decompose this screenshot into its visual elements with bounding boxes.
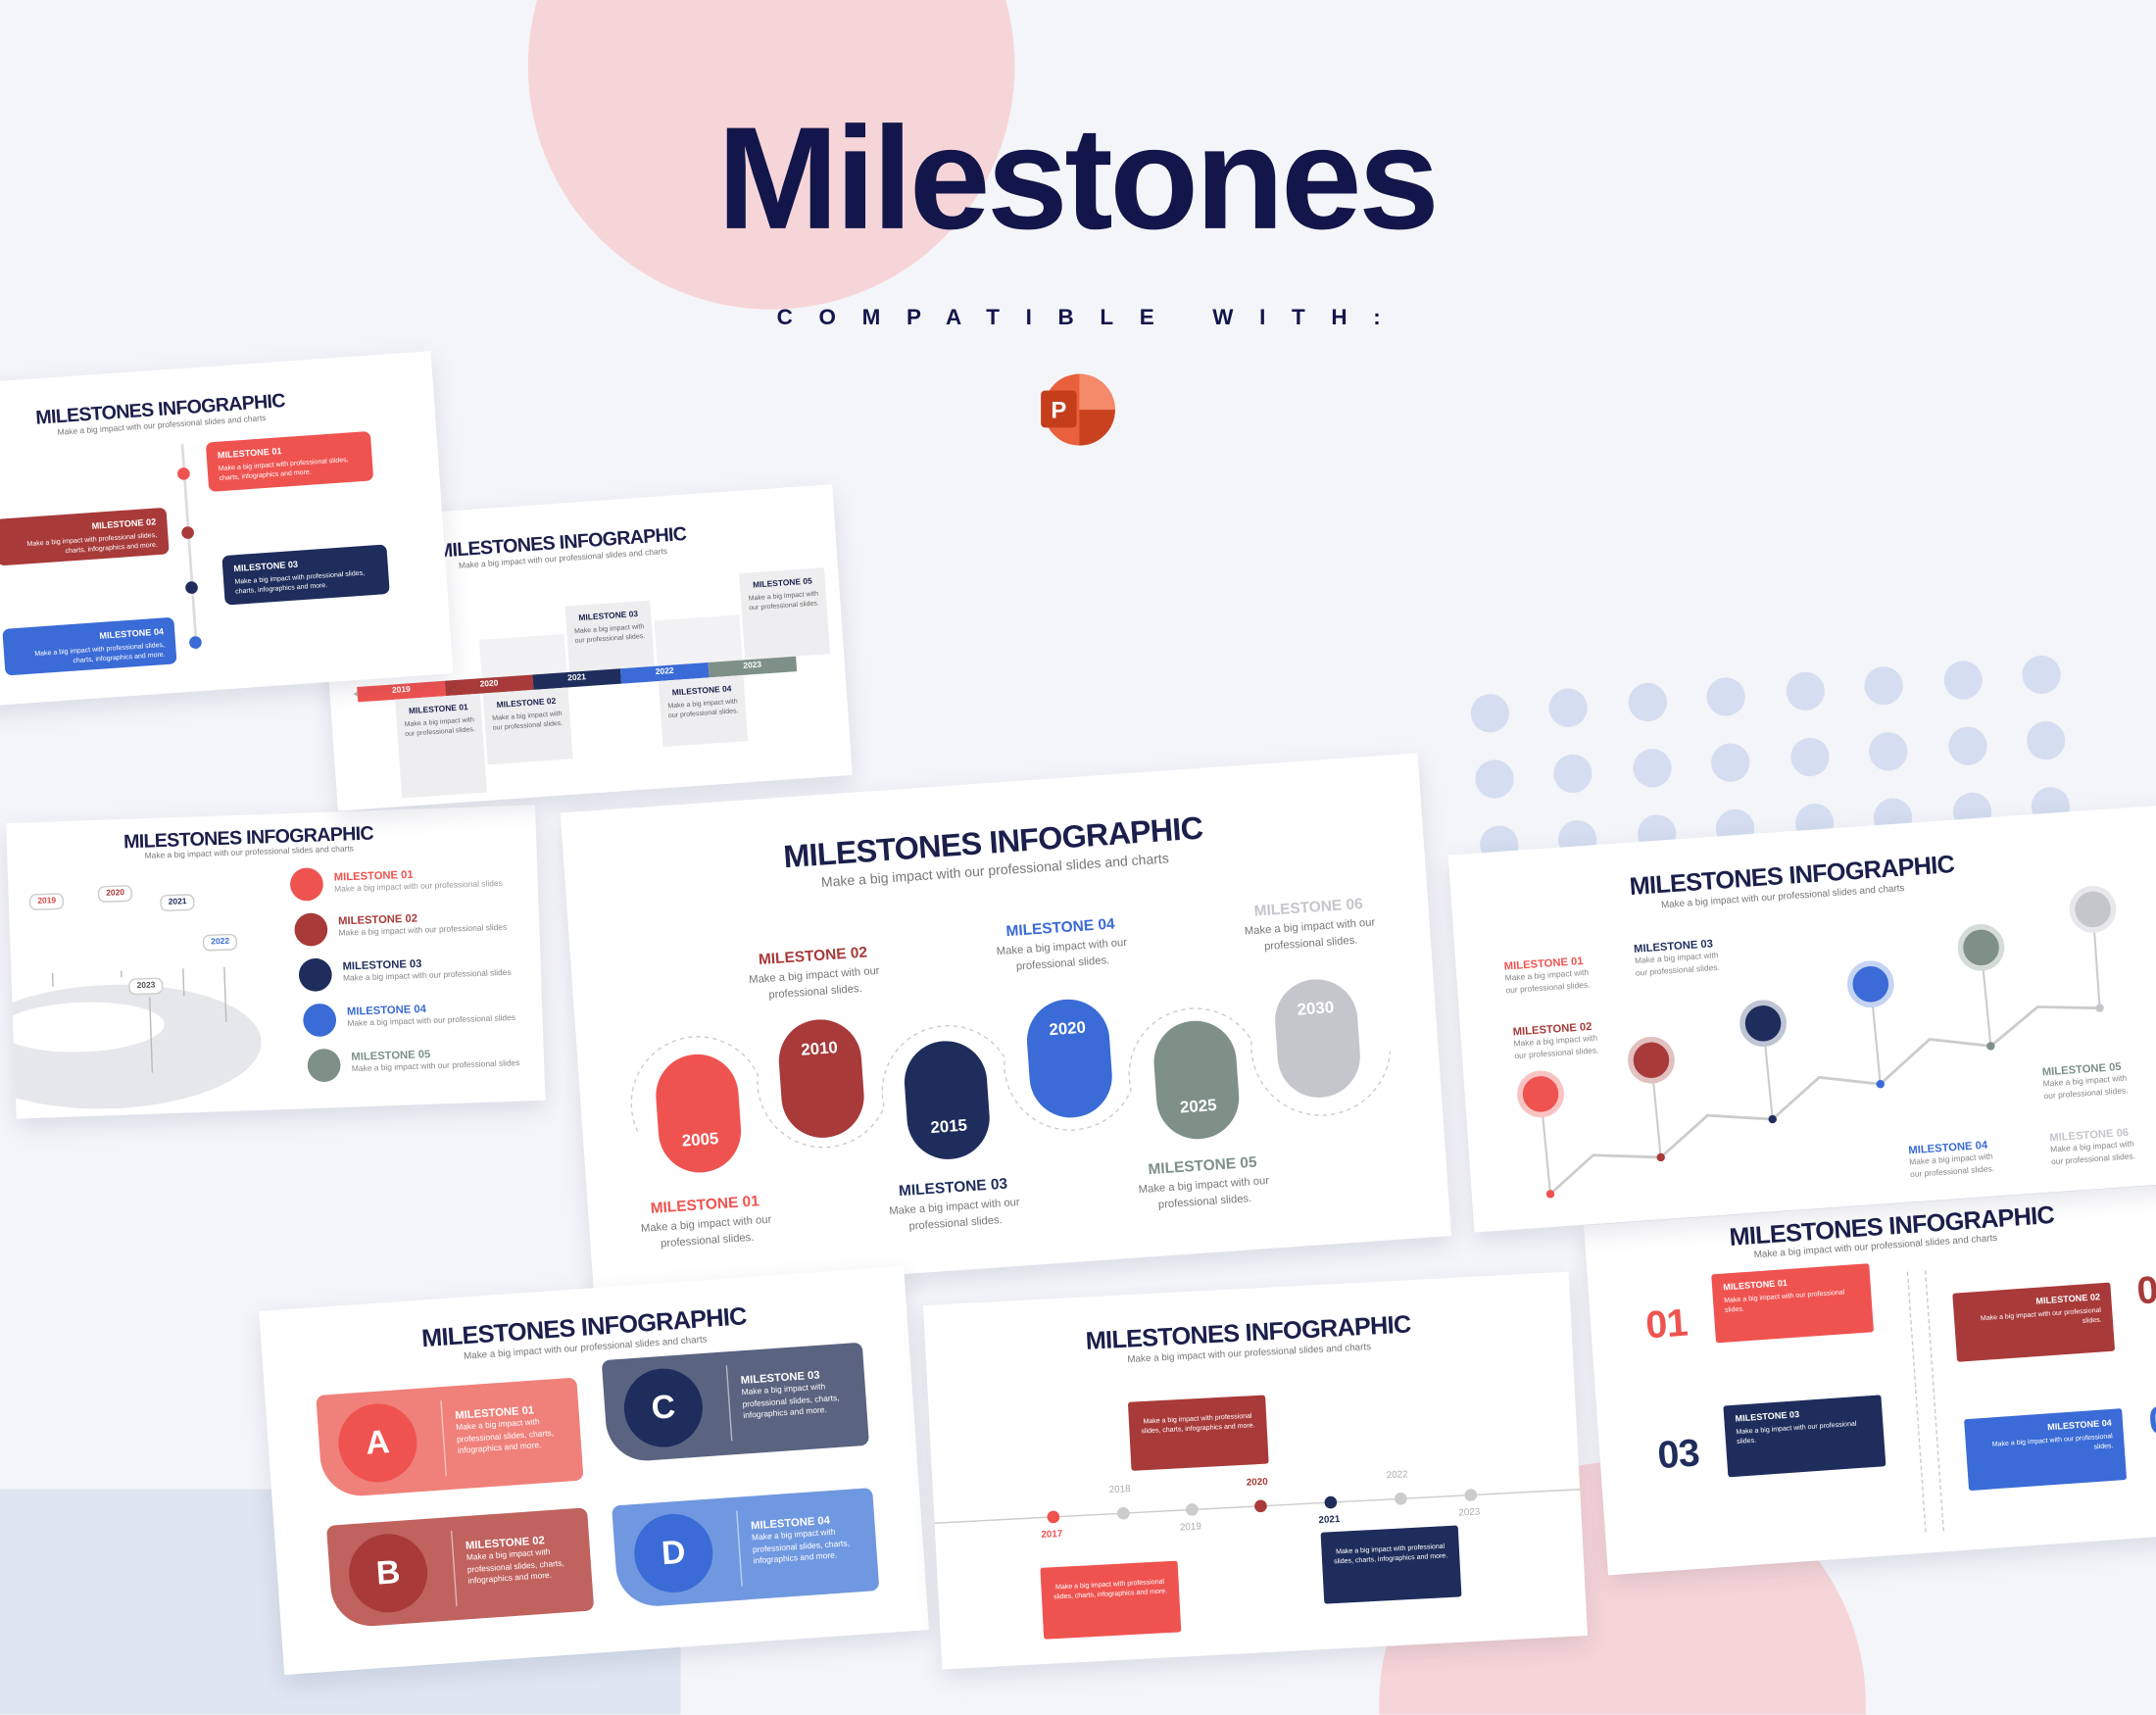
capsules: [654, 1052, 744, 1175]
slide heading: MILESTONES INFOGRAPHIC: [1629, 851, 1955, 901]
slide heading: MILESTONES INFOGRAPHIC: [436, 522, 687, 562]
slide heading: MILESTONES INFOGRAPHIC: [782, 809, 1203, 874]
milestone labels: Make a big impact with our professional slides.: [641, 1213, 772, 1250]
milestone texts: [1503, 955, 1591, 996]
panel: slide 6 numbered callouts: Make a big impact with our professional slides.: [1992, 1433, 2114, 1451]
box C: Make a big impact with professional slides, charts, infographics and more.: [741, 1384, 840, 1421]
milestone boxes: Make a big impact with professional slides, charts, infographics and more.: [219, 456, 349, 483]
milestone boxes: [206, 431, 373, 492]
panel: slide 5 line chart: Make a big impact with: [1635, 953, 1719, 966]
background: pink circle bottom: [1379, 1461, 1866, 1715]
panel: slide 6 numbered callouts: Make a big impact with our professional slides.: [1981, 1306, 2102, 1326]
panel: slide 8 dot timeline: Make a big impact with professional slides, charts, infographics and more.: [1334, 1543, 1447, 1566]
milestone list: MILESTONE 03: [342, 957, 422, 972]
panel: slide 3 list timeline: 2022: [211, 938, 229, 947]
panel: slide 1 vertical timeline: Make a big impact with our professional slides and charts: [57, 415, 267, 438]
panel: slide 6 numbered callouts: MILESTONE 02: [2035, 1293, 2100, 1307]
timeline bar: MILESTONE 01: [409, 704, 468, 716]
panel: slide 5 line chart: our professional slides.: [1910, 1165, 1994, 1179]
panel: slide 3 list timeline: [6, 805, 546, 1119]
timeline bar: MILESTONE 02: [496, 698, 557, 710]
line chart with icons: [1517, 886, 2117, 1199]
panel: slide 5 line chart: Make a big impact with: [2050, 1141, 2134, 1155]
milestone list: [290, 868, 520, 1082]
timeline bar: Make a big impact with our professional slides.: [749, 591, 819, 613]
panel: slide 1 vertical timeline: Make a big impact with professional slides, charts, infographics and more.: [34, 641, 166, 665]
panel: slide 8 dot timeline: 2022: [1387, 1470, 1408, 1481]
timeline bar: [353, 567, 830, 798]
panel: slide 2 horizontal timeline: [318, 484, 853, 811]
timeline bar: 2020: [479, 680, 499, 689]
panel: slide 1 vertical timeline: MILESTONE 04: [99, 627, 164, 642]
panel: slide 4 main capsule timeline: 2030: [1297, 998, 1335, 1019]
panel: slide 4 main capsule timeline: 2010: [801, 1038, 838, 1059]
milestone list: Make a big impact with our professional slides: [352, 1060, 520, 1074]
callouts: MILESTONE 01: [1723, 1279, 1788, 1293]
timeline bar: 2022: [656, 667, 674, 677]
box A: Make a big impact with professional slides, charts, infographics and more.: [456, 1419, 554, 1456]
panel: slide 5 line chart: MILESTONE 04: [1908, 1139, 1988, 1156]
panel: slide 4 main capsule timeline: MILESTONE 05: [1148, 1154, 1257, 1178]
milestone list: MILESTONE 05: [351, 1048, 430, 1063]
milestone texts: Make a big impact with: [1504, 969, 1589, 984]
icon: powerpoint: P: [1051, 398, 1066, 424]
callout boxes: [1128, 1395, 1269, 1471]
slide heading: MILESTONES INFOGRAPHIC: [123, 821, 373, 853]
panel: slide 1 vertical timeline: MILESTONE 02: [91, 517, 157, 532]
capsules: 2005: [681, 1129, 719, 1151]
timeline bar: Make a big impact with our professional slides.: [492, 710, 564, 733]
box B: B: [375, 1554, 402, 1592]
panel: slide 1 vertical timeline: Make a big impact with professional slides, charts, infographics and more.: [26, 531, 158, 556]
milestone texts: our professional slides.: [1505, 981, 1591, 996]
panel: slide 8 dot timeline: Make a big impact with professional slides, charts, infographics and more.: [1054, 1578, 1167, 1601]
milestone texts: MILESTONE 01: [1503, 955, 1584, 972]
box C: MILESTONE 03: [740, 1369, 820, 1387]
dashed wave: [631, 1007, 1392, 1149]
box D: [612, 1488, 879, 1609]
panel: slide 1 vertical timeline: [0, 351, 454, 714]
panel: slide 5 line chart: MILESTONE 02: [1512, 1020, 1592, 1038]
panel: slide 8 dot timeline: 2021: [1318, 1515, 1341, 1526]
panel: slide 8 dot timeline: 2020: [1247, 1478, 1268, 1489]
timeline bar: MILESTONE 03: [578, 611, 638, 623]
milestone list: Make a big impact with our professional slides: [347, 1015, 515, 1029]
gray ellipse with flags: [12, 885, 261, 1109]
timeline: [935, 1489, 1580, 1524]
panel: slide 5 line chart: our professional slides.: [2051, 1152, 2135, 1166]
panel: slide 4 main capsule timeline: [561, 753, 1451, 1296]
panel: slide 5 line chart: our professional slides.: [2043, 1087, 2129, 1101]
panel: slide 4 main capsule timeline: Make a big impact with our professional slides.: [889, 1197, 1020, 1232]
box C: [602, 1343, 869, 1463]
panel: slide 5 line chart: MILESTONE 03: [1634, 937, 1713, 956]
vertical line: [181, 444, 198, 650]
milestone list: MILESTONE 01: [334, 868, 414, 883]
milestone list: Make a big impact with our professional slides: [338, 924, 507, 939]
panel: slide 5 line chart: MILESTONE 06: [2049, 1126, 2129, 1144]
timeline bar: Make a big impact with our professional slides.: [574, 623, 646, 646]
panel: slide 2 horizontal timeline: Make a big impact with our professional slides and charts: [459, 548, 667, 571]
panel: slide 5 line chart: Make a big impact with: [1909, 1153, 1993, 1168]
milestone labels: MILESTONE 01: [650, 1194, 760, 1217]
box B: Make a big impact with professional slides, charts, infographics and more.: [466, 1549, 564, 1586]
background: bottom-left blue block: [0, 1490, 681, 1715]
slide heading: MILESTONES INFOGRAPHIC: [420, 1302, 748, 1352]
panel: slide 5 line chart: MILESTONE 05: [2041, 1060, 2122, 1078]
panel: slide 6 numbered callouts: Make a big impact with our professional slides and charts: [1753, 1234, 1998, 1260]
panel: slide 4 main capsule timeline: 2015: [930, 1115, 968, 1137]
panel: slide 3 list timeline: 2020: [106, 890, 124, 899]
panel: slide 8 dot timeline: 2017: [1041, 1530, 1063, 1541]
timeline bar: Make a big impact with our professional slides.: [667, 698, 739, 721]
box C: C: [650, 1389, 676, 1427]
panel: slide 5 line chart: our professional slides.: [1514, 1047, 1599, 1060]
background: dot grid: [1470, 656, 2070, 853]
title: Milestones: [717, 98, 1436, 260]
box B: [326, 1507, 594, 1629]
panel: slide 5 line chart: Make a big impact with our professional slides and charts: [1661, 884, 1905, 910]
timeline bar: 2021: [567, 674, 586, 683]
slide heading: MILESTONES INFOGRAPHIC: [1729, 1200, 2055, 1251]
panel: slide 5 line chart: our professional slides.: [1636, 963, 1720, 978]
icon: powerpoint: [1041, 374, 1115, 446]
timeline bar: MILESTONE 04: [672, 686, 732, 698]
panel: slide 5 line chart: Make a big impact with: [1513, 1035, 1597, 1050]
panel: slide 7 ABCD boxes: [259, 1266, 929, 1675]
milestone labels: [641, 1194, 772, 1250]
panel: slide 4 main capsule timeline: Make a big impact with our professional slides and charts: [821, 852, 1169, 891]
panel: slide 8 dot timeline: 2023: [1458, 1507, 1481, 1518]
panel: slide 1 vertical timeline: MILESTONE 03: [233, 561, 298, 574]
panel: slide 8 dot timeline: 2019: [1180, 1522, 1201, 1533]
box D: Make a big impact with professional slides, charts, infographics and more.: [752, 1529, 850, 1566]
callouts: [1711, 1263, 1874, 1343]
slide heading: MILESTONES INFOGRAPHIC: [1085, 1310, 1411, 1354]
gray ellipse with flags: 2023: [137, 982, 156, 991]
box A: MILESTONE 01: [455, 1403, 534, 1422]
dotted connectors: [1907, 1272, 1927, 1533]
box A: A: [365, 1424, 391, 1462]
panel: slide 3 list timeline: 2021: [169, 899, 187, 907]
panel: slide 8 dot timeline: [923, 1272, 1588, 1669]
panel: slide 6 numbered callouts: MILESTONE 04: [2047, 1419, 2112, 1433]
panel: slide 4 main capsule timeline: Make a big impact with our professional slides.: [1245, 916, 1376, 952]
milestone boxes: MILESTONE 01: [218, 447, 282, 461]
panel: slide 6 numbered callouts: [1584, 1168, 2156, 1575]
milestone list: MILESTONE 02: [338, 912, 417, 927]
callout boxes: Make a big impact with professional slides, charts, infographics and more.: [1141, 1412, 1255, 1436]
panel: slide 6 numbered callouts: 03: [1656, 1431, 1700, 1477]
timeline bar: MILESTONE 05: [753, 578, 812, 590]
panel: slide 4 main capsule timeline: MILESTONE 02: [758, 945, 868, 968]
callouts: Make a big impact with our professional slides.: [1724, 1289, 1845, 1315]
panel: slide 4 main capsule timeline: MILESTONE 04: [1005, 916, 1115, 940]
background: pink circle top: [528, 0, 1014, 310]
panel: slide 4 main capsule timeline: Make a big impact with our professional slides.: [1138, 1175, 1269, 1210]
panel: slide 5 line chart: [1448, 796, 2156, 1233]
panel: slide 6 numbered callouts: MILESTONE 03: [1735, 1410, 1800, 1424]
milestone list: Make a big impact with our professional slides: [334, 881, 503, 895]
panel: slide 4 main capsule timeline: Make a big impact with our professional slides.: [749, 965, 880, 1001]
panel: slide 4 main capsule timeline: Make a big impact with our professional slides.: [996, 937, 1127, 972]
panel: slide 1 vertical timeline: Make a big impact with professional slides, charts, infographics and more.: [234, 569, 365, 597]
panel: slide 3 list timeline: 2019: [37, 898, 56, 906]
numbers: 01: [1644, 1301, 1689, 1347]
panel: slide 8 dot timeline: Make a big impact with our professional slides and charts: [1127, 1343, 1371, 1365]
milestone list: MILESTONE 04: [347, 1003, 426, 1018]
timeline bar: Make a big impact with our professional slides.: [404, 716, 475, 739]
panel: slide 4 main capsule timeline: MILESTONE 03: [899, 1176, 1008, 1200]
milestone list: Make a big impact with our professional slides: [343, 969, 512, 984]
box D: D: [661, 1534, 687, 1573]
panel: slide 3 list timeline: Make a big impact with our professional slides and charts: [145, 846, 354, 861]
panel: slide 4 main capsule timeline: 2025: [1179, 1095, 1217, 1117]
box A: [316, 1377, 584, 1498]
panel: slide 7 ABCD boxes: Make a big impact with our professional slides and charts: [464, 1335, 708, 1362]
panel: slide 8 dot timeline: 2018: [1108, 1485, 1131, 1495]
subtitle: compatible with: COMPATIBLE WITH:: [777, 307, 1406, 330]
panel: slide 6 numbered callouts: Make a big impact with our professional slides.: [1736, 1420, 1857, 1446]
panel: slide 4 main capsule timeline: 2020: [1049, 1017, 1087, 1039]
timeline bar: 2023: [743, 662, 761, 671]
panel: slide 4 main capsule timeline: MILESTONE 06: [1253, 896, 1363, 920]
box B: MILESTONE 02: [466, 1534, 545, 1552]
slide heading: MILESTONES INFOGRAPHIC: [35, 389, 285, 428]
timeline bar: 2019: [392, 686, 411, 696]
panel: slide 5 line chart: Make a big impact with: [2043, 1075, 2128, 1090]
box D: MILESTONE 04: [751, 1514, 830, 1532]
